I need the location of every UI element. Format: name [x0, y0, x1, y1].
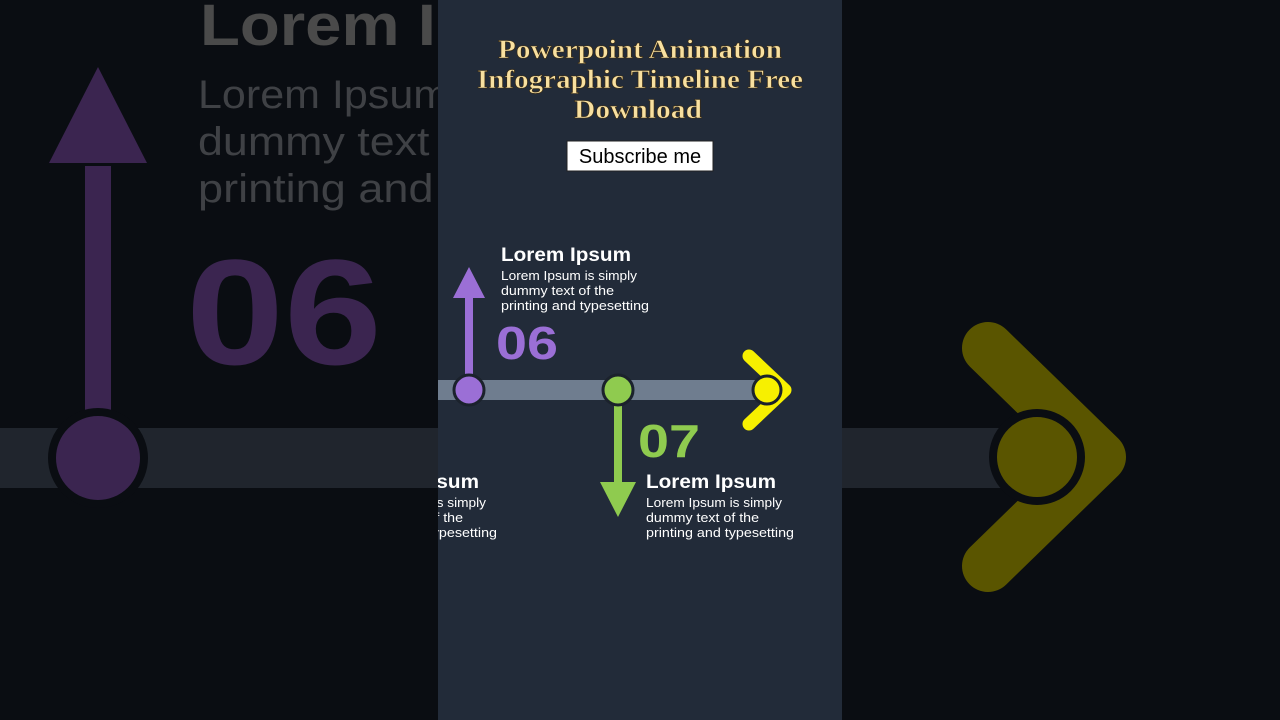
text block: dim body: printing and typesetting: [198, 167, 664, 211]
text block: step 06: printing and typesetting: [501, 298, 649, 313]
panel: center timeline: [438, 0, 842, 720]
panel: blurred left background: [0, 0, 664, 504]
icon: dim yellow chevron: [988, 348, 1100, 566]
number: 07: 07: [638, 415, 700, 467]
text block: step 06: dummy text of the: [501, 283, 614, 298]
text block: step 05 cut: dummy text of the: [350, 510, 463, 525]
title: Powerpoint Animation: [498, 35, 783, 64]
heading: step 05 cut: Lorem Ipsum: [349, 472, 479, 493]
title: Download: [574, 95, 703, 124]
icon: yellow chevron end: [749, 356, 785, 424]
button: subscribe: Subscribe me: [579, 146, 701, 168]
number: dim 06: 06: [186, 228, 382, 396]
heading: step 07: Lorem Ipsum: [646, 472, 776, 493]
icon: green arrow down 07: [600, 375, 636, 517]
number: 06: 06: [496, 317, 558, 369]
button: subscribe: [567, 141, 713, 171]
text block: dim body: dummy text of the: [198, 120, 554, 164]
timeline bar: [438, 380, 768, 400]
text block: step 07: printing and typesetting: [646, 525, 794, 540]
text block: dim body: Lorem Ipsum is simply: [198, 73, 626, 117]
text block: step 06: Lorem Ipsum is simply: [501, 268, 638, 283]
panel: blurred right background: [842, 348, 1100, 566]
text block: step 05 cut: Lorem Ipsum is simply: [350, 495, 487, 510]
text block: step 07: dummy text of the: [646, 510, 759, 525]
title: Infographic Timeline Free: [477, 65, 803, 94]
icon: purple arrow up 06: [453, 267, 485, 405]
heading: step 06: Lorem Ipsum: [501, 245, 631, 266]
text block: step 07: Lorem Ipsum is simply: [646, 495, 783, 510]
icon: dim purple arrow up: [49, 67, 147, 504]
text block: step 05 cut: printing and typesetting: [349, 525, 497, 540]
